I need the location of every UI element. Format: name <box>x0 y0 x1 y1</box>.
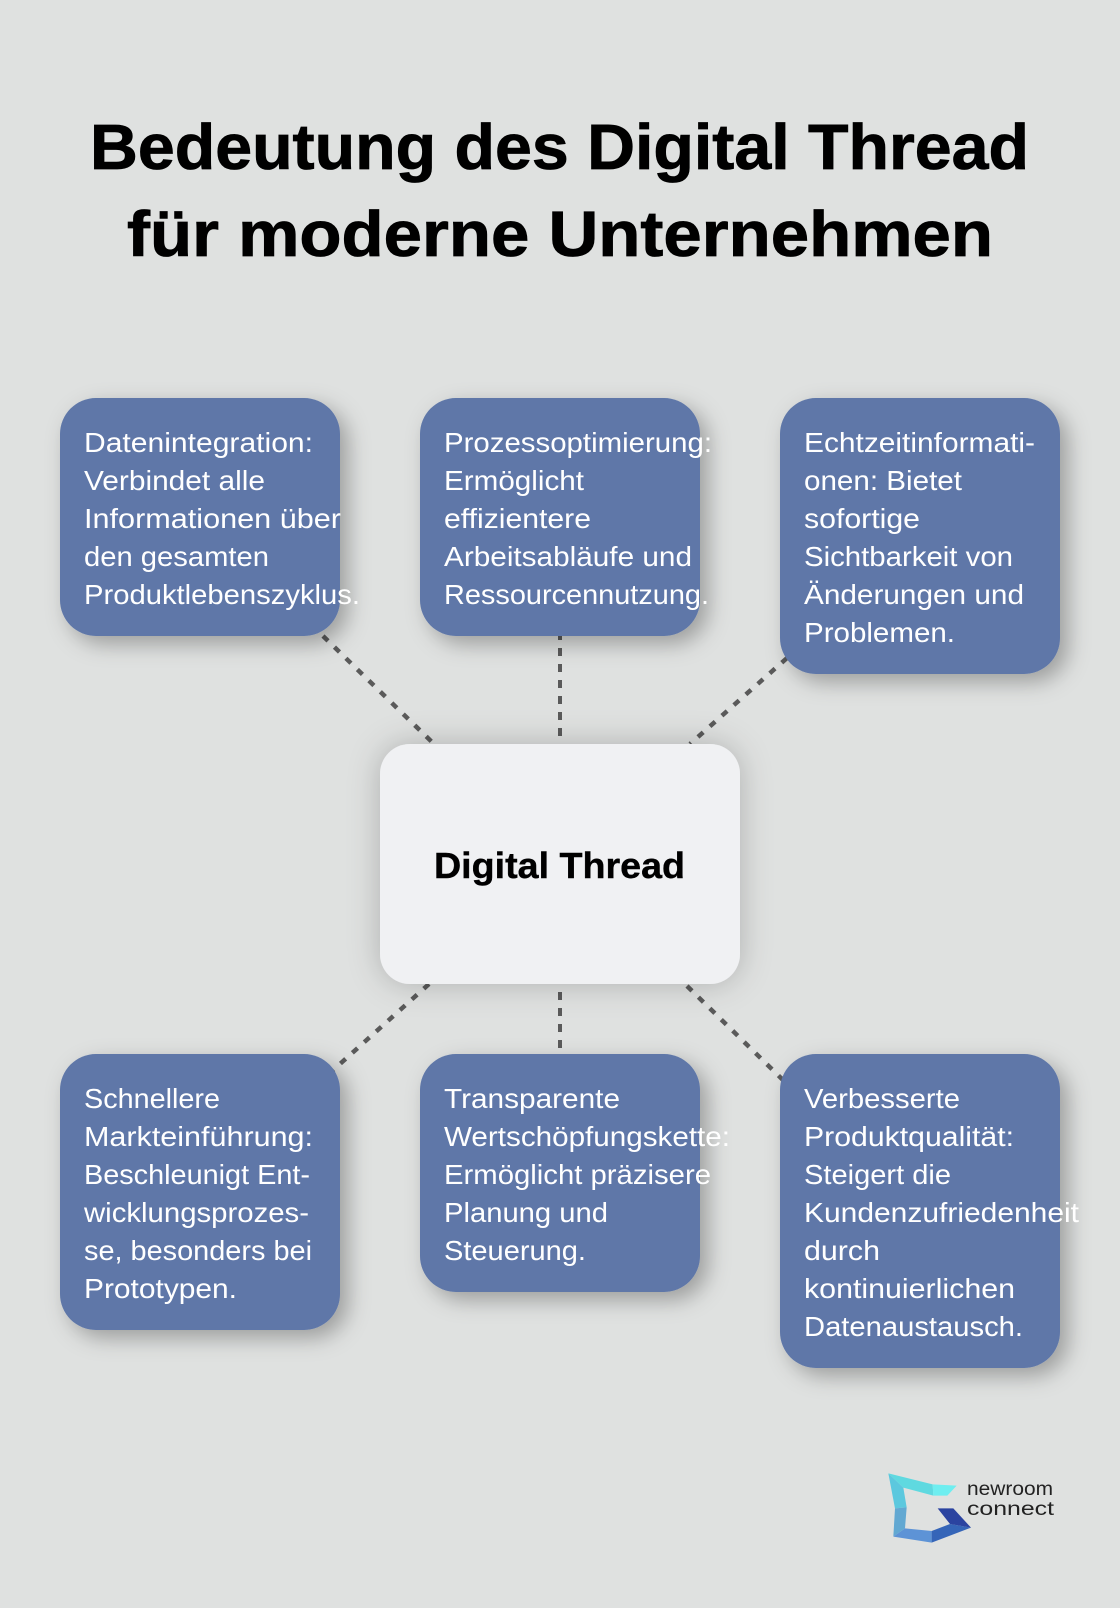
icon: logo mark <box>888 1473 971 1543</box>
panel: Transparente Wertschöpfungskette <box>420 1054 730 1292</box>
panel: Datenintegration <box>60 398 360 636</box>
panel: Echtzeitinformationen: onen: Bietet <box>804 465 962 496</box>
panel: Datenintegration: Datenintegration: <box>84 427 313 458</box>
panel: Echtzeitinformationen: Echtzeitinformati- <box>804 427 1035 458</box>
panel: Prozessoptimierung: Ressourcennutzung. <box>444 579 709 610</box>
panel: Datenintegration: den gesamten <box>84 541 269 572</box>
panel: Datenintegration: Produktlebenszyklus. <box>84 579 360 610</box>
panel: Prozessoptimierung: effizientere <box>444 503 591 534</box>
panel: Verbesserte Produktqualität: Produktqualität: <box>804 1121 1014 1152</box>
panel: Transparente Wertschöpfungskette: Planung und <box>444 1197 608 1228</box>
panel: Schnellere Markteinführung: Schnellere <box>84 1083 220 1114</box>
panel: Verbesserte Produktqualität <box>780 1054 1079 1368</box>
panel: Echtzeitinformationen <box>780 398 1060 674</box>
panel: Schnellere Markteinführung: Markteinführung: <box>84 1121 313 1152</box>
connector: Echtzeitinformationen <box>690 658 787 744</box>
panel: Transparente Wertschöpfungskette: Ermöglicht präzisere <box>444 1159 711 1190</box>
panel: Echtzeitinformationen: sofortige <box>804 503 920 534</box>
title: für moderne Unternehmen <box>127 198 993 270</box>
panel: center Digital Thread <box>380 744 740 984</box>
panel: Verbesserte Produktqualität: Steigert die <box>804 1159 951 1190</box>
panel: Transparente Wertschöpfungskette: Transparente <box>444 1083 620 1114</box>
panel: center Digital Thread: Digital Thread <box>434 845 685 886</box>
connector: Schnellere Markteinführung <box>331 984 429 1072</box>
panel: Echtzeitinformationen: Änderungen und <box>804 579 1024 610</box>
logo: newroom connect: connect <box>967 1499 1055 1520</box>
panel: Schnellere Markteinführung <box>60 1054 340 1330</box>
title <box>90 111 1029 270</box>
logo: newroom connect <box>888 1473 1055 1543</box>
panel: Transparente Wertschöpfungskette: Steuerung. <box>444 1235 586 1266</box>
panel: Verbesserte Produktqualität: kontinuierlichen <box>804 1273 1015 1304</box>
logo: newroom connect: newroom <box>967 1479 1053 1500</box>
title: Bedeutung des Digital Thread <box>90 111 1029 183</box>
connector: Datenintegration <box>323 636 434 744</box>
panel: Verbesserte Produktqualität: durch <box>804 1235 880 1266</box>
panel: Schnellere Markteinführung: se, besonders bei <box>84 1235 312 1266</box>
panel: Schnellere Markteinführung: wicklungsprozes- <box>83 1197 309 1228</box>
panel: Transparente Wertschöpfungskette: Wertschöpfungskette: <box>444 1121 730 1152</box>
connector: Prozessoptimierung <box>558 636 562 736</box>
panel: Echtzeitinformationen: Problemen. <box>804 617 955 648</box>
connector: Verbesserte Produktqualität <box>687 986 785 1082</box>
panel: Schnellere Markteinführung: Beschleunigt Ent- <box>84 1159 310 1190</box>
panel: Prozessoptimierung: Prozessoptimierung: <box>444 427 712 458</box>
connector: Transparente Wertschöpfungskette <box>558 992 562 1050</box>
panel: Schnellere Markteinführung: Prototypen. <box>84 1273 237 1304</box>
panel: Datenintegration: Informationen über <box>84 503 341 534</box>
panel: Echtzeitinformationen: Sichtbarkeit von <box>804 541 1013 572</box>
panel: Prozessoptimierung: Arbeitsabläufe und <box>444 541 692 572</box>
panel: Verbesserte Produktqualität: Datenaustausch. <box>804 1311 1023 1342</box>
panel: Prozessoptimierung <box>420 398 712 636</box>
panel: Verbesserte Produktqualität: Verbesserte <box>804 1083 960 1114</box>
panel: Prozessoptimierung: Ermöglicht <box>444 465 584 496</box>
panel: Verbesserte Produktqualität: Kundenzufriedenheit <box>804 1197 1079 1228</box>
panel: Datenintegration: Verbindet alle <box>84 465 265 496</box>
